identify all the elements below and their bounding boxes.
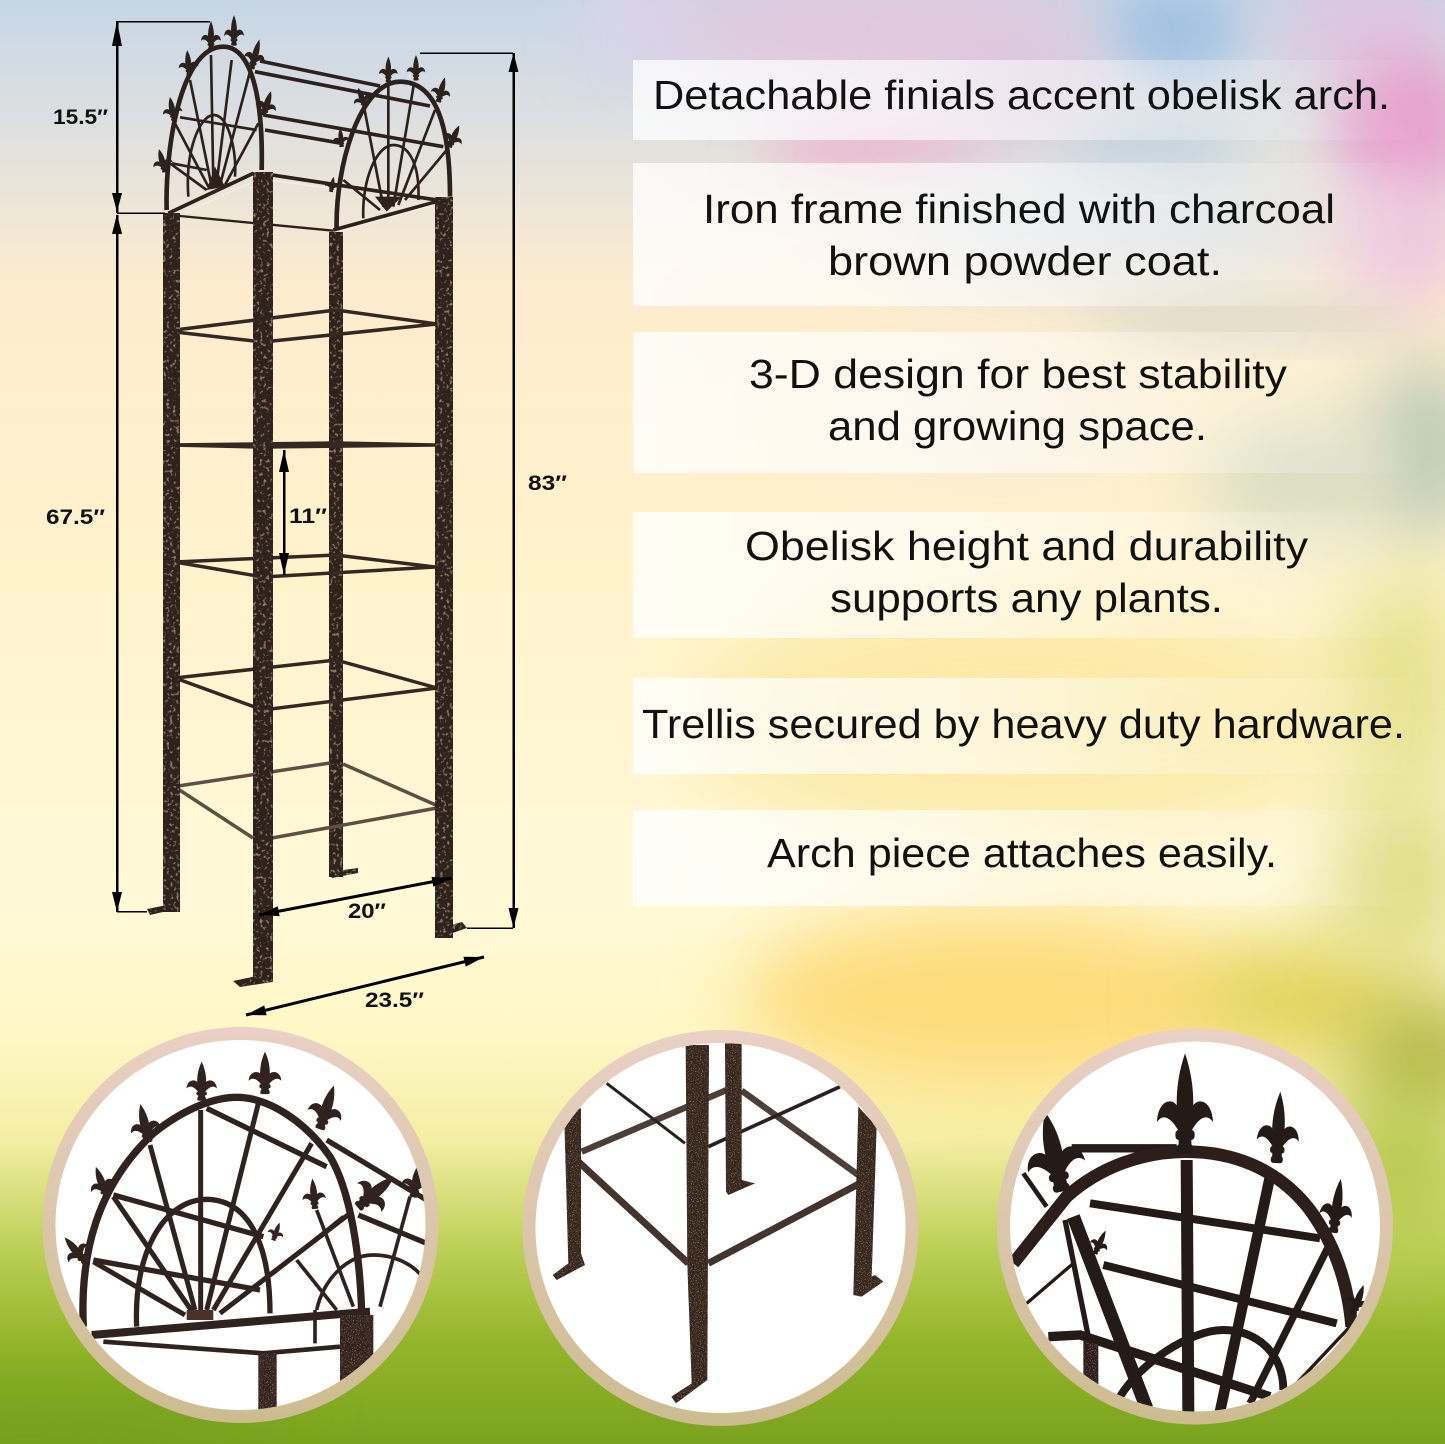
front post [233,172,273,987]
back post [329,232,358,878]
dimension labels: 23.5″ [365,988,424,1012]
panel: height and durability: supports any plants. [830,575,1223,621]
circle: base detail [522,1030,918,1426]
dimension arrow: 83 [420,52,518,929]
dimension arrow: 20 [259,877,452,916]
right arch [337,82,450,230]
panel: height and durability: Obelisk height and durability [745,523,1309,569]
dimension labels: 11″ [289,504,327,528]
rails [255,61,443,147]
dimension arrow: 15.5 [112,21,210,214]
dimension labels: 67.5″ [46,505,105,529]
panel: height and durability [633,512,1423,638]
circle: finial detail [997,1028,1393,1424]
finials [149,15,468,193]
panel: 3-D design: and growing space. [828,403,1207,449]
circle: arch detail [42,1027,438,1423]
top frame [168,173,437,230]
panel: hardware: Trellis secured by heavy duty hardware. [642,701,1405,747]
dimension arrow: 23.5 [246,957,484,1015]
panel: 3-D design: 3-D design for best stability [749,351,1288,397]
panel: iron frame: brown powder coat. [828,238,1222,284]
dimension labels: 15.5″ [53,105,108,129]
panel: hardware [633,678,1423,774]
right post [435,197,467,938]
dimension arrow: 67.5 [112,214,147,912]
panel: arch piece: Arch piece attaches easily. [767,830,1277,876]
dimension labels: 83″ [528,471,567,495]
dimension arrow: 11 [279,450,289,575]
dimension labels: 20″ [348,899,386,923]
obelisk trellis [147,15,468,987]
panel: finials [633,60,1423,140]
arches in top section [149,15,468,231]
panel: iron frame [633,163,1423,306]
panel: arch piece [633,810,1423,906]
panel: 3-D design [633,332,1423,473]
left post [147,213,180,915]
panel: iron frame: Iron frame finished with charcoal [703,186,1335,232]
dimension labels [46,105,567,1012]
panel: finials: Detachable finials accent obelisk arch. [653,72,1390,118]
ring bars [172,310,438,838]
left arch [167,47,262,210]
